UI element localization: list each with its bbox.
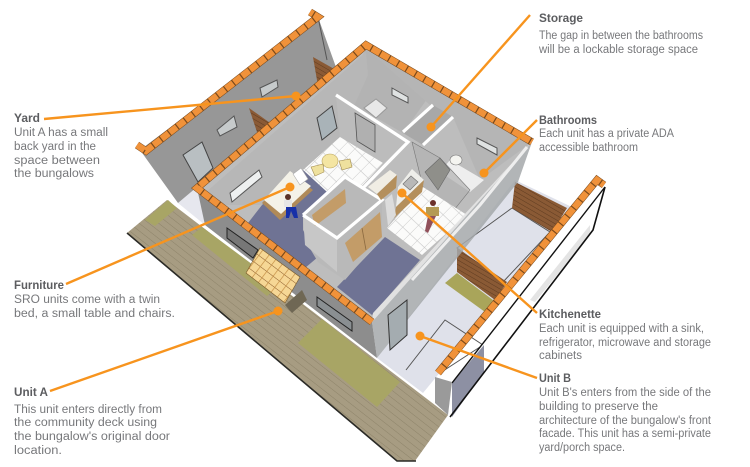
callout: storage: The gap in between the bathrooms (539, 30, 703, 42)
front window left (227, 228, 258, 258)
kitchenette counter (368, 169, 424, 226)
fence triangle upper (313, 57, 336, 86)
person in kitchen (425, 200, 439, 233)
callout: kitchenette: Kitchenette (539, 309, 601, 321)
callout: unit B: building to preserve the (539, 401, 658, 413)
neighbouring door (183, 142, 213, 182)
community deck (127, 200, 448, 461)
bed (262, 168, 313, 220)
callout: yard: space between (14, 155, 100, 167)
callout: kitchenette: refrigerator, microwave and storage (539, 337, 711, 349)
person in blue trousers (284, 194, 298, 218)
yard planting bed (445, 273, 493, 312)
right glazed wall (372, 142, 532, 358)
callout: furniture: SRO units come with a twin (14, 294, 160, 306)
leader: unit B (416, 332, 537, 378)
leader: unit A (50, 306, 282, 391)
partition face (336, 95, 408, 163)
neighbouring roof tiles (137, 12, 318, 151)
neighbouring bungalow wall (140, 17, 337, 203)
blue carpet left (248, 170, 327, 268)
back rooms (336, 50, 532, 215)
neighbouring window (217, 116, 237, 136)
front window right (317, 297, 352, 331)
wood fence lower (457, 248, 507, 300)
next-door cut section (435, 187, 605, 417)
callout: unit A: the bungalow's original door (14, 431, 170, 443)
main roof tiles (197, 45, 532, 322)
entry step (285, 290, 307, 313)
leader: bathrooms (480, 120, 537, 178)
left interior wall (205, 52, 368, 205)
callout: yard: the bungalows (14, 168, 94, 180)
callout: furniture (14, 280, 175, 320)
callout: bathrooms: Each unit has a private ADA (539, 128, 674, 140)
callout: unit A: Unit A (14, 387, 48, 399)
callout: furniture: bed, a small table and chairs. (14, 308, 175, 320)
callout: unit A: location. (14, 445, 62, 457)
callout: unit B (539, 373, 712, 454)
side yard paving (377, 180, 574, 393)
callout: bathrooms: accessible bathroom (539, 142, 638, 154)
callout: unit A: This unit enters directly from (14, 404, 162, 416)
callout: bathrooms: Bathrooms (539, 115, 597, 127)
front facade wall (197, 188, 377, 358)
callout: yard: Unit A has a small (14, 127, 108, 139)
closet door two (345, 212, 382, 262)
callout: unit A (14, 387, 170, 457)
storage gap floor (403, 105, 453, 145)
bath floor (440, 160, 484, 192)
callout: yard (14, 113, 108, 180)
callout: unit B: yard/porch space. (539, 442, 625, 454)
callout: unit B: architecture of the bungalow's front (539, 415, 712, 427)
leader: kitchenette (398, 188, 537, 313)
blue carpet right (337, 237, 420, 315)
rear yard paving (178, 187, 226, 225)
leader: furniture (66, 182, 294, 284)
next-door roof tiles (438, 180, 604, 373)
vanity (425, 158, 450, 190)
glass shower (412, 142, 470, 215)
callout: kitchenette: cabinets (539, 350, 582, 362)
kitchen sink (403, 176, 418, 190)
door awning (246, 248, 300, 303)
neighbouring window upper (260, 80, 278, 97)
callout: kitchenette (539, 309, 711, 362)
callout: yard: Yard (14, 113, 40, 125)
callout: kitchenette: Each unit is equipped with a sink, (539, 323, 704, 335)
tiled living floor (303, 137, 383, 192)
wood fence upper (512, 182, 567, 232)
callout: yard: back yard in the (14, 141, 96, 153)
bathroom window A (392, 88, 408, 103)
callout: storage: Storage (539, 13, 583, 25)
fence triangle lower (249, 108, 273, 138)
callout: storage (538, 13, 703, 56)
bathroom window B (477, 138, 497, 155)
white partition walls (336, 95, 453, 189)
table and chairs (311, 154, 352, 176)
interior glazed door (317, 106, 337, 140)
callout: furniture: Furniture (14, 280, 64, 292)
building interior base (197, 45, 532, 322)
closet door one (312, 189, 346, 226)
callout: bathrooms (539, 115, 674, 154)
sink unit (364, 99, 387, 118)
callout: unit A: the community deck using (14, 417, 157, 429)
leader: yard (44, 92, 300, 119)
tiled kitchen floor (387, 187, 467, 255)
callout: unit B: Unit B's enters from the side of the (539, 387, 711, 399)
end door (388, 300, 407, 350)
leader: storage (426, 15, 530, 132)
toilet (450, 155, 462, 165)
callout: unit B: Unit B (539, 373, 571, 385)
callout: storage: will be a lockable storage space (538, 44, 698, 56)
callout: unit B: facade. This unit has a semi-private (539, 428, 711, 440)
closet block (303, 177, 382, 280)
interior window (230, 170, 262, 202)
deck planting beds (145, 200, 400, 407)
